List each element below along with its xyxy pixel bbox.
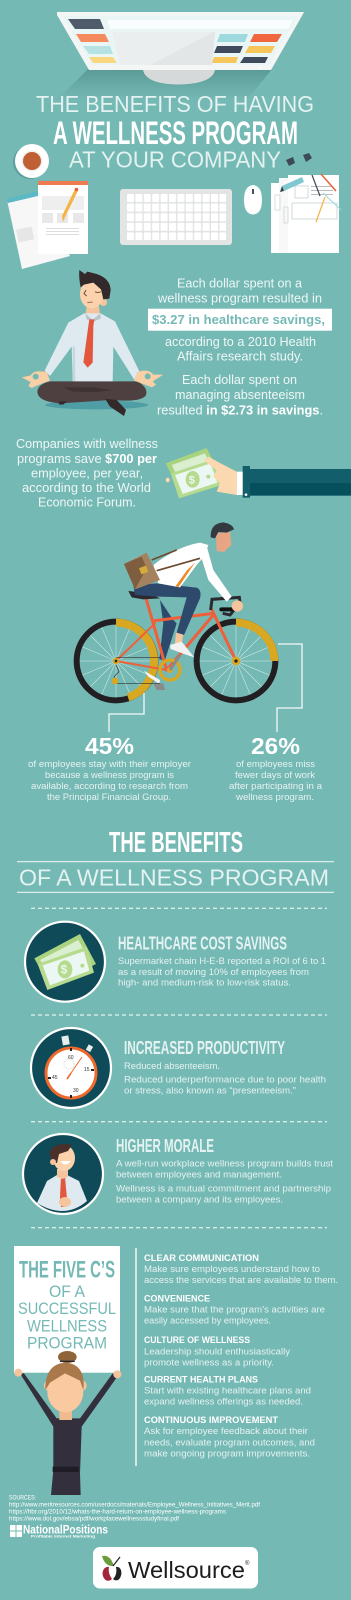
torso (153, 543, 208, 587)
stat text: $700 per employee: employee, per year, (31, 467, 143, 481)
panel: healthcare cost savings: high- and medium-risk to low-risk status. (118, 978, 291, 989)
callout lines for bicycle wheels (109, 644, 302, 732)
logo: Wellsource: ® (245, 1560, 250, 1567)
title: AT YOUR COMPANY (69, 146, 281, 172)
stat text: $700 per employee (16, 437, 158, 510)
mouse (244, 185, 262, 214)
stat text: healthcare and absenteeism savings: Each dollar spent on (182, 373, 297, 387)
stat text: $700 per employee: Companies with wellness (16, 437, 158, 451)
icon: stopwatch in circle: 30 (73, 1088, 79, 1094)
panel: five Cs sign (14, 1246, 120, 1373)
icon: binder clips (286, 153, 312, 166)
stat text: healthcare and absenteeism savings: $3.27 in healthcare savings, (152, 312, 325, 327)
logo: Wellsource (93, 1547, 258, 1588)
list: five Cs (144, 1253, 338, 1459)
stat: 26%: after participating in a (229, 781, 323, 792)
icon: hand holding money (166, 448, 351, 498)
stat text: $700 per employee: Economic Forum. (38, 496, 136, 510)
icon: smiling man in circle (23, 1134, 103, 1214)
item: culture of wellness: CULTURE OF WELLNESS (144, 1335, 251, 1346)
far leg (159, 600, 177, 660)
item: convenience: CONVENIENCE (144, 1294, 211, 1305)
stat: 26%: wellness program. (235, 792, 314, 803)
sources: https://hbr.org/2010/12/whats-the-hard-return-on-employee-wellness-programs (9, 1509, 226, 1515)
item: continuous improvement: needs, evaluate program outcomes, and (144, 1437, 315, 1448)
keyboard (120, 189, 232, 245)
panel: five Cs sign: THE FIVE C’S (19, 1257, 115, 1284)
stat text: healthcare and absenteeism savings: Affairs research study. (177, 350, 303, 364)
icon: cyclist on bicycle (77, 522, 275, 700)
bag strap (152, 550, 200, 571)
panel: higher morale: A well-run workplace wellness program builds trust (116, 1159, 333, 1170)
item: clear communication: CLEAR COMMUNICATION (144, 1253, 259, 1264)
icon: woman holding sign (14, 1351, 121, 1495)
stat: 45% (28, 733, 192, 803)
stat: 45%: 45% (85, 733, 134, 759)
item: convenience: easily accessed by employees. (144, 1316, 271, 1327)
icon: money in circle (25, 922, 105, 1002)
sources: https://www.dol.gov/ebsa/pdf/workplacewellnessstudyfinal.pdf (9, 1516, 179, 1522)
panel: five Cs sign: PROGRAM (27, 1335, 107, 1353)
section heading: the benefits (17, 827, 334, 893)
stat text: $700 per employee: programs save $700 per (17, 452, 157, 466)
stat: 45%: the Principal Financial Group. (47, 792, 171, 803)
item: continuous improvement: CONTINUOUS IMPROVEMENT (144, 1415, 278, 1426)
logo: National Positions (10, 1524, 108, 1538)
panel: healthcare cost savings (25, 922, 326, 1002)
sources: http://www.meritresources.com/userdocs/materials/Employee_Wellness_Initiatives_Merit.pdf (9, 1502, 260, 1508)
stat: 45%: because a wellness program is (45, 770, 174, 781)
handlebar (211, 597, 240, 615)
sources: SOURCES: (9, 1495, 36, 1501)
stat text: healthcare and absenteeism savings: wellness program resulted in (157, 291, 322, 305)
stat: 45%: available, according to research from (31, 781, 188, 792)
stat: 45%: of employees stay with their employer (28, 759, 192, 770)
panel: higher morale: Wellness is a mutual commitment and partnership (116, 1184, 331, 1195)
arm (197, 545, 232, 602)
panel: higher morale: between employees and management. (116, 1170, 282, 1181)
near leg (133, 583, 201, 635)
item: culture of wellness (144, 1335, 290, 1368)
title (36, 91, 314, 172)
stat text: healthcare and absenteeism savings: Each dollar spent on a (177, 276, 302, 290)
stat: 26%: of employees miss (236, 759, 315, 770)
panel: increased productivity: or stress, also known as “presenteeism.” (124, 1086, 296, 1097)
item: continuous improvement: make ongoing program improvements. (144, 1448, 310, 1459)
divider (135, 1248, 137, 1466)
stat: 26%: 26% (251, 733, 300, 759)
panel: five Cs sign: OF A (49, 1283, 85, 1301)
panel: higher morale (23, 1134, 333, 1214)
logo: National Positions: Profitable Internet Marketing (31, 1534, 95, 1538)
logo: Wellsource: Wellsource (128, 1557, 245, 1583)
panel: increased productivity: Reduced underperformance due to poor health (124, 1075, 326, 1086)
item: convenience (144, 1294, 325, 1327)
stat text: healthcare and absenteeism savings (148, 276, 332, 418)
logo: National Positions: NationalPositions (23, 1524, 108, 1536)
icon: coffee cup (13, 144, 49, 179)
icon: money in circle: $ (61, 963, 68, 977)
item: current health plans (144, 1375, 311, 1408)
stat text: healthcare and absenteeism savings: resulted in $2.73 in savings. (157, 404, 323, 418)
panel: higher morale: between a company and its employees. (116, 1195, 283, 1206)
sources (9, 1495, 260, 1522)
monitor illustration (57, 12, 304, 100)
item: current health plans: CURRENT HEALTH PLANS (144, 1375, 259, 1386)
item: convenience: Make sure that the program’s activities are (144, 1305, 325, 1316)
right papers and pens (271, 174, 341, 253)
head (216, 532, 231, 552)
panel: five Cs sign: SUCCESSFUL (18, 1300, 116, 1318)
stat text: healthcare and absenteeism savings: managing absenteeism (175, 388, 305, 402)
seat (128, 591, 160, 599)
icon: meditating man (22, 270, 163, 416)
icon: stopwatch in circle: 45 (52, 1075, 58, 1081)
title: THE BENEFITS OF HAVING (36, 91, 314, 117)
panel: increased productivity: Reduced absenteeism. (124, 1061, 220, 1072)
bag (124, 553, 160, 589)
rear wheel (77, 622, 155, 700)
item: clear communication: Make sure employees understand how to (144, 1264, 320, 1275)
stat text: $700 per employee: according to the World (22, 481, 151, 495)
item: continuous improvement: Ask for employee feedback about their (144, 1426, 309, 1437)
item: current health plans: Start with existing healthcare plans and (144, 1386, 311, 1397)
item: continuous improvement (144, 1415, 315, 1459)
frame (116, 598, 236, 670)
item: current health plans: expand wellness offerings as needed. (144, 1397, 303, 1408)
item: clear communication (144, 1253, 338, 1286)
section heading: the benefits: THE BENEFITS (109, 827, 243, 859)
item: culture of wellness: Leadership should enthusiastically (144, 1346, 290, 1357)
panel: healthcare cost savings: as a result of moving 10% of employees from (118, 967, 309, 978)
front wheel (197, 622, 275, 700)
stat: 26% (229, 733, 323, 803)
panel: increased productivity (31, 1028, 326, 1108)
icon: hand holding money: $ (189, 474, 196, 486)
left papers (6, 181, 88, 269)
panel: five Cs sign: WELLNESS (27, 1318, 107, 1336)
item: clear communication: access the services that are available to them. (144, 1275, 338, 1286)
panel: healthcare cost savings: Supermarket chain H-E-B reported a ROI of 6 to 1 (118, 956, 326, 967)
panel: higher morale: HIGHER MORALE (116, 1136, 214, 1156)
icon: stopwatch in circle: 15 (84, 1067, 90, 1073)
item: culture of wellness: promote wellness as a priority. (144, 1357, 274, 1368)
stat: 26%: fewer days of work (235, 770, 315, 781)
drivetrain (112, 655, 240, 684)
icon: stopwatch in circle (31, 1028, 111, 1108)
section heading: the benefits: OF A WELLNESS PROGRAM (19, 865, 329, 891)
stat text: healthcare and absenteeism savings: according to a 2010 Health (165, 335, 316, 349)
icon: stopwatch in circle: 60 (68, 1055, 74, 1061)
